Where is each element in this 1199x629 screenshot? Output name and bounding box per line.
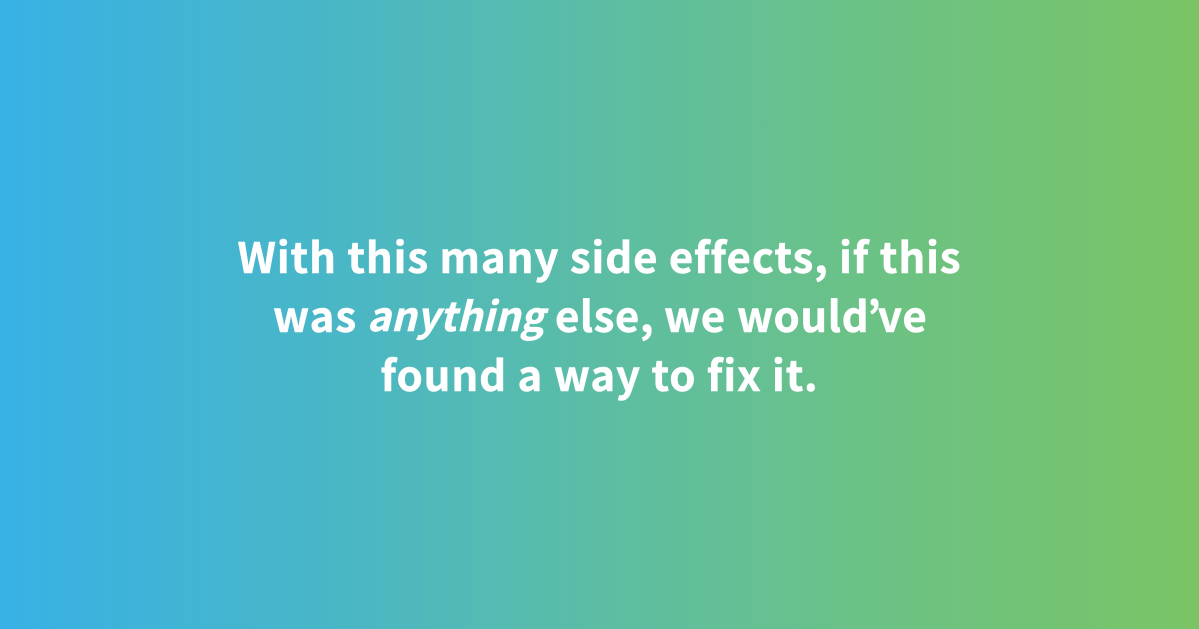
quote text: anything xyxy=(367,285,544,343)
quote text: was xyxy=(273,284,357,345)
quote text: we xyxy=(664,284,726,345)
quote text: found a way to fix it. xyxy=(380,343,819,404)
quote text: would’ve xyxy=(737,284,927,345)
quote text: With this many side effects, if this xyxy=(238,225,961,286)
quote text: else, xyxy=(555,284,654,345)
quote text xyxy=(238,225,961,404)
